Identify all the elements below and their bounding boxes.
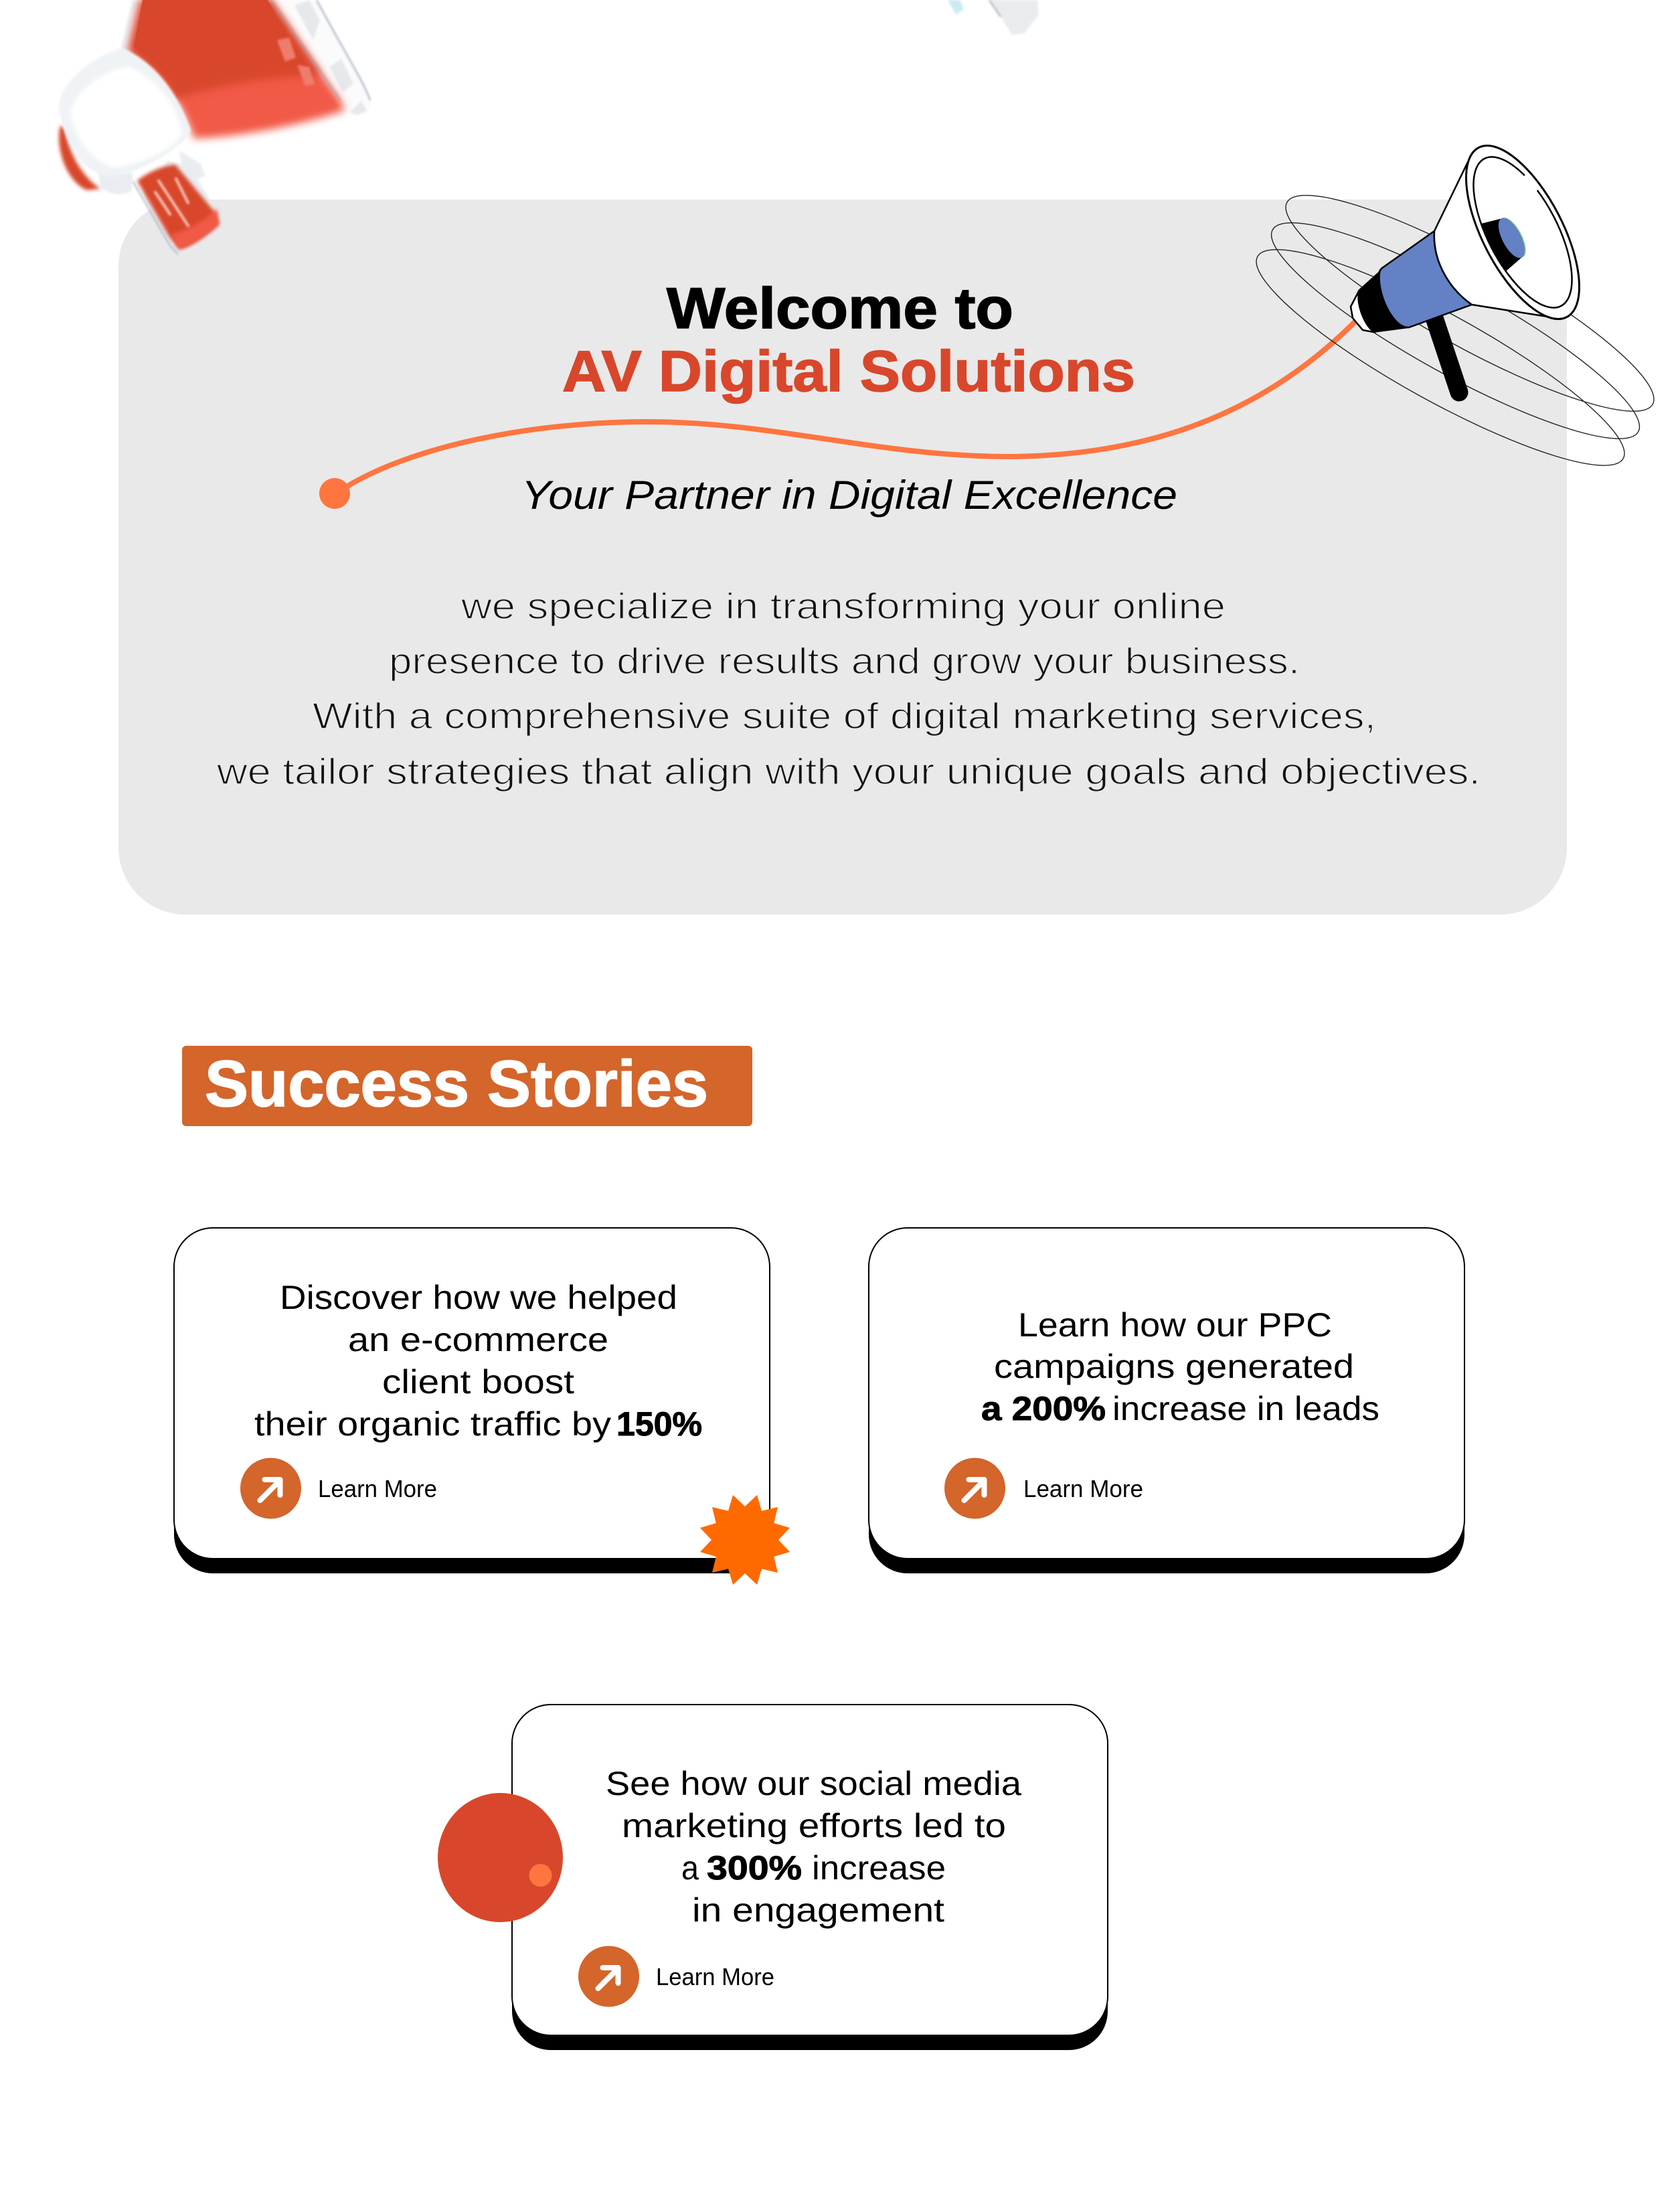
megaphone rim — [1443, 129, 1602, 335]
icon: outlined blue megaphone — [1351, 129, 1602, 392]
card text: 300% — [707, 1849, 802, 1887]
card text: increase in leads — [1112, 1390, 1379, 1427]
card text: Discover how we helped — [280, 1279, 677, 1316]
card text: their organic traffic by — [254, 1405, 611, 1443]
panel: welcome intro background — [118, 200, 1567, 915]
title: AV Digital Solutions: AV Digital Solutions — [562, 339, 1135, 404]
megaphone white cone — [1434, 163, 1556, 318]
icon: blurred red megaphone top left — [59, 0, 371, 255]
megaphone speaker — [1481, 218, 1521, 271]
text block: intro paragraph: presence to drive results and grow your business. — [389, 640, 1300, 682]
card text: in engagement — [692, 1891, 944, 1929]
card text: an e-commerce — [348, 1321, 608, 1358]
decorative swoosh line with dot — [319, 321, 1355, 509]
megaphone blue body — [1379, 231, 1472, 327]
card text: See how our social media — [606, 1765, 1021, 1802]
text block: intro paragraph — [216, 585, 1481, 792]
card text — [254, 1279, 702, 1443]
panel: success story card 1 — [174, 1228, 790, 1585]
card text — [981, 1306, 1379, 1427]
megaphone handle — [1435, 320, 1459, 392]
megaphone horn — [129, 0, 345, 139]
panel: success story card 3 — [438, 1705, 1108, 2050]
megaphone highlights — [277, 37, 315, 86]
megaphone left crescent — [59, 126, 100, 190]
megaphone black band — [1359, 270, 1409, 332]
card text: campaigns generated — [994, 1348, 1354, 1385]
link: Learn More: Learn More — [318, 1475, 437, 1502]
megaphone lower glass — [98, 173, 133, 194]
card text: Learn how our PPC — [1018, 1306, 1332, 1344]
text block: intro paragraph: we specialize in transforming your online — [460, 585, 1226, 627]
megaphone handle — [133, 161, 222, 255]
icon: arrow button — [944, 1458, 1005, 1518]
text block: intro paragraph: we tailor strategies that align with your unique goals and objectives. — [216, 751, 1481, 792]
panel: success story card 2 — [869, 1228, 1464, 1573]
card text: marketing efforts led to — [622, 1807, 1006, 1845]
icon: arrow button — [578, 1946, 639, 2007]
megaphone inner rim — [1454, 143, 1592, 322]
link: Learn More: Learn More — [1023, 1475, 1143, 1502]
icon: orange starburst — [700, 1495, 790, 1585]
megaphone white bulb — [59, 48, 205, 181]
title: Welcome to: Welcome to — [667, 277, 1013, 341]
icon: red circle with dot — [438, 1793, 563, 1922]
text block: intro paragraph: With a comprehensive suite of digital marketing services, — [313, 695, 1376, 736]
card text: 150% — [616, 1405, 702, 1443]
card text: a 200% — [981, 1390, 1106, 1427]
card text: a — [681, 1849, 699, 1887]
icon: arrow button — [240, 1458, 301, 1518]
megaphone rim — [121, 0, 371, 115]
card text: client boost — [382, 1363, 574, 1401]
subtitle: Your Partner in Digital Excellence — [521, 473, 1177, 518]
megaphone end cap — [1351, 290, 1373, 332]
card text — [606, 1765, 1021, 1929]
icon: sound wave ellipses — [1236, 164, 1674, 497]
card text: increase — [812, 1849, 946, 1887]
icon: faint blurred megaphone at top centre — [948, 0, 1039, 35]
link: Learn More: Learn More — [656, 1963, 774, 1990]
heading: Success Stories: Success Stories — [205, 1047, 708, 1120]
